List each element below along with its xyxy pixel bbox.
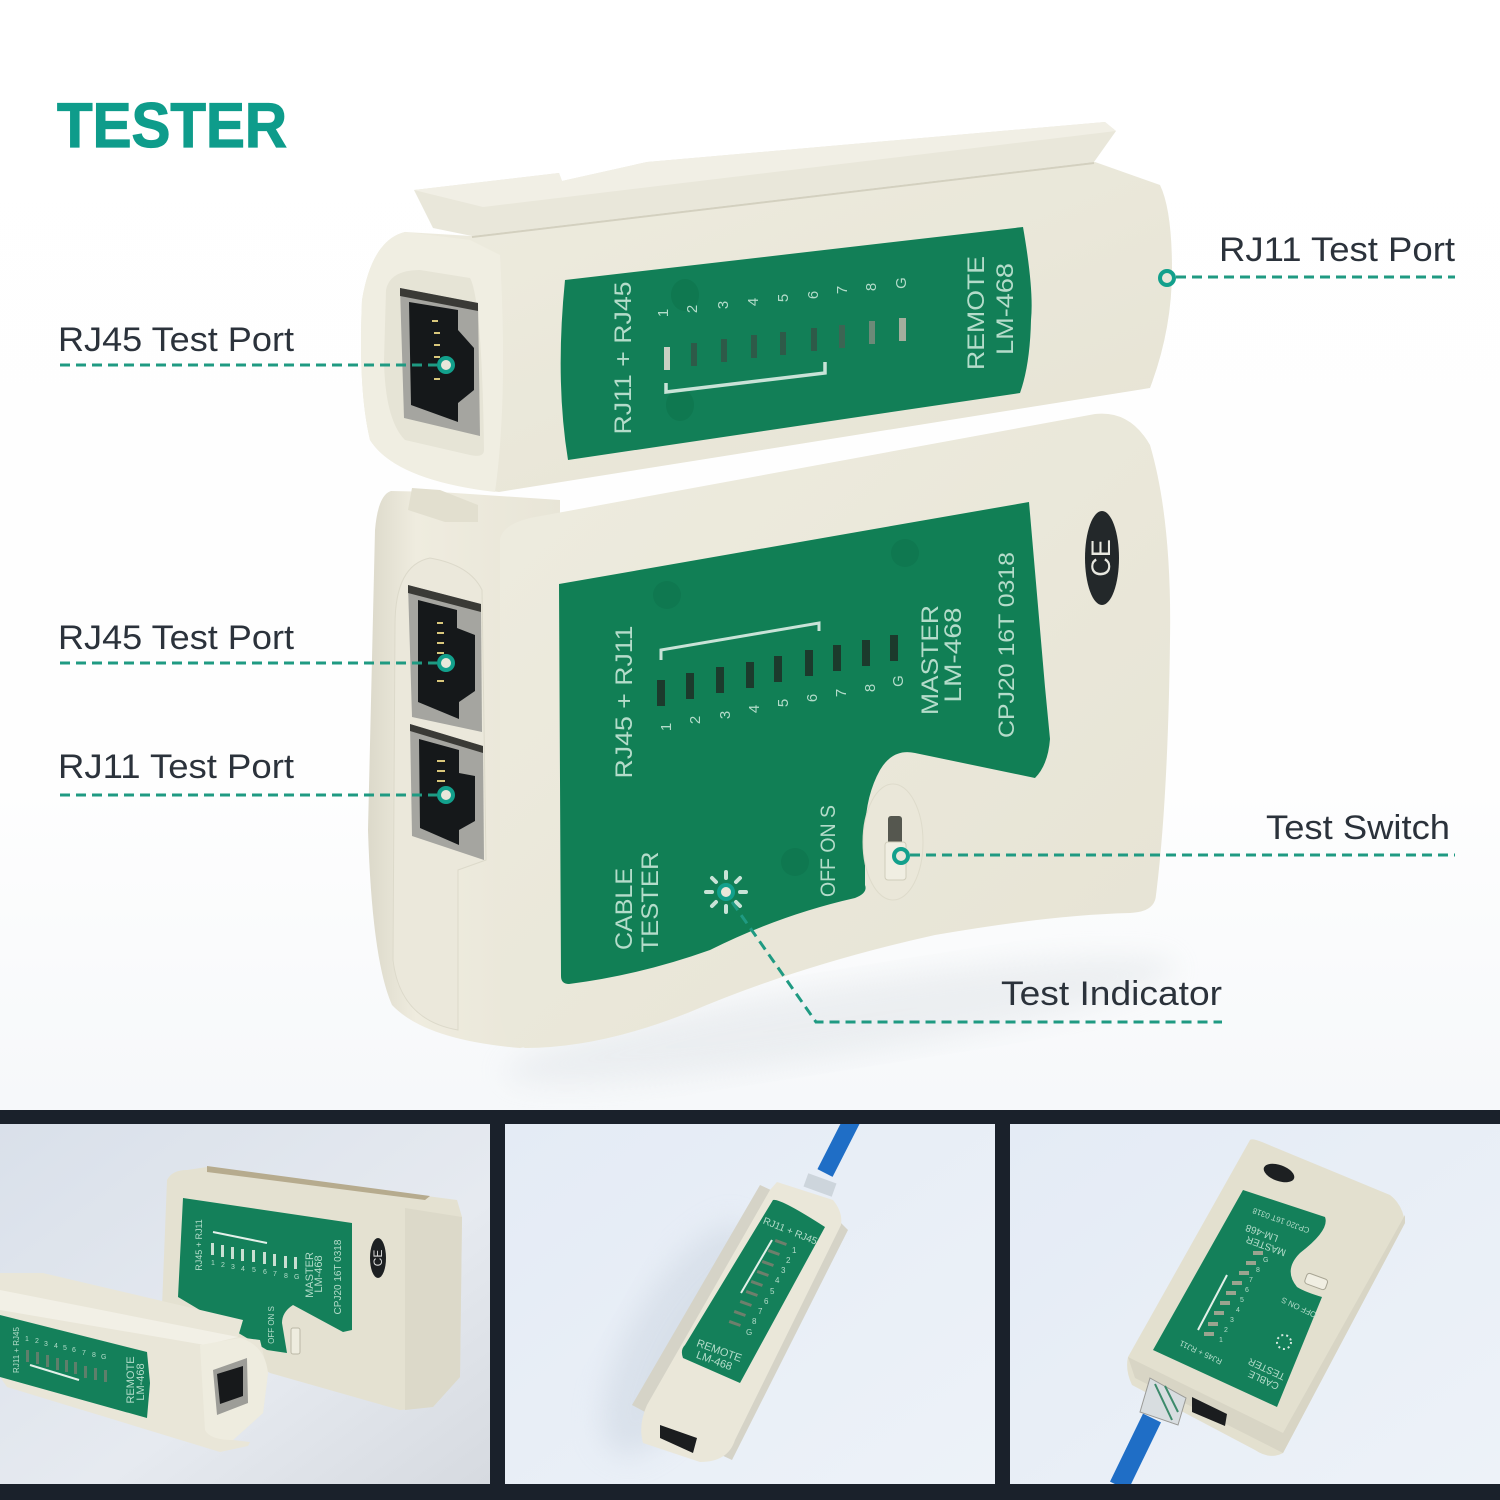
- photo panel: remote with cable: 2: [786, 1256, 791, 1265]
- photo panel: master with cable: 4: [1236, 1307, 1240, 1314]
- photo panel: two units: 2: [221, 1262, 225, 1269]
- remote label text: 8: [863, 283, 880, 291]
- master label text: 8: [862, 684, 879, 692]
- callout: RJ11 test port (master): [58, 748, 453, 802]
- photo panel: master with cable: LM-468: [1244, 1221, 1280, 1243]
- photo panel: two units: 4: [54, 1343, 58, 1350]
- remote bracket: [666, 362, 825, 392]
- photo panel: remote with cable: G: [746, 1328, 752, 1337]
- photo panel: two units: 6: [263, 1269, 267, 1276]
- callout: RJ45 test port (remote): [58, 321, 453, 372]
- remote label text: 7: [834, 286, 851, 294]
- ports and cable in panel: [1192, 1397, 1227, 1426]
- photo panel: two units: G: [101, 1354, 106, 1361]
- remote label text: 3: [715, 301, 732, 309]
- photo panel: two units: 3: [44, 1341, 48, 1348]
- remote label text: G: [893, 277, 910, 289]
- callout: RJ45 test port (master): RJ45 Test Port: [58, 619, 295, 657]
- master label text: [611, 552, 1019, 952]
- master label text: 7: [833, 689, 850, 697]
- photo panel: remote with cable: 1: [792, 1246, 797, 1255]
- master front face: [500, 414, 1170, 1048]
- remote rails: [632, 1185, 775, 1412]
- photo panel: master with cable: CABLE: [1246, 1367, 1281, 1391]
- photo panel: master with cable: 8: [1256, 1267, 1260, 1274]
- remote rail: [414, 122, 1116, 236]
- photo panel: remote with cable: 7: [758, 1307, 763, 1316]
- callout: RJ11 test port (remote): [1160, 231, 1456, 285]
- remote end face: [361, 232, 503, 492]
- master body in panel: [1127, 1139, 1405, 1456]
- master label text: LM-468: [940, 608, 967, 702]
- remote label text: REMOTE: [963, 256, 990, 370]
- photo panel: two units: OFF ON S: [267, 1306, 276, 1344]
- remote label text: 2: [684, 305, 701, 313]
- photo panel: master with cable: TESTER: [1247, 1355, 1287, 1382]
- master label text: 4: [746, 705, 763, 713]
- master label text: CPJ20 16T 0318: [994, 552, 1019, 738]
- title: TESTER: [57, 91, 287, 161]
- photo panel: remote with cable: LM-468: [694, 1349, 734, 1373]
- photo panel: master with cable: G: [1263, 1257, 1268, 1264]
- photo panel: two units: 8: [284, 1273, 288, 1280]
- blue cable: [825, 1120, 852, 1173]
- master label text: 5: [775, 699, 792, 707]
- bottom dark band: [0, 1110, 1500, 1500]
- RJ45 port on master: [408, 585, 482, 732]
- remote green label: [561, 227, 1032, 460]
- remote body: [361, 162, 1172, 492]
- photo panel: two units: 7: [82, 1350, 86, 1357]
- master label text: G: [890, 675, 907, 687]
- photo panel: two units: REMOTE: [125, 1356, 137, 1404]
- RJ11 port on master: [410, 724, 484, 860]
- photo panel: two units: 2: [35, 1338, 39, 1345]
- photo panel: two units: 4: [241, 1266, 245, 1273]
- photo panel: two units: 8: [92, 1352, 96, 1359]
- remote tester unit: [361, 122, 1172, 492]
- photo panel: master with cable: 1: [1219, 1337, 1223, 1344]
- remote label text: 4: [745, 298, 762, 306]
- master green label: [559, 502, 1050, 984]
- master tester unit: [368, 414, 1170, 1048]
- photo panel: master with cable: 7: [1249, 1277, 1253, 1284]
- photo panel: two units: 3: [231, 1264, 235, 1271]
- icon: indicator sun: [706, 872, 746, 912]
- remote label text: 5: [775, 294, 792, 302]
- photo panel: remote with cable: 5: [770, 1287, 775, 1296]
- callout: RJ11 test port (remote): RJ11 Test Port: [1219, 231, 1456, 269]
- CE mark: [1085, 511, 1119, 605]
- RJ45 port on remote: [400, 288, 480, 436]
- photo panel: two units: 7: [273, 1271, 277, 1278]
- callout: RJ45 test port (remote): RJ45 Test Port: [58, 321, 295, 359]
- photo panel: remote with cable: RJ11 + RJ45: [761, 1216, 819, 1248]
- CE mark: CE: [1086, 539, 1116, 577]
- master label text: 6: [804, 694, 821, 702]
- master label text: RJ45 + RJ11: [611, 626, 638, 778]
- photo panel: master with cable: RJ45 + RJ11: [1178, 1338, 1224, 1366]
- remote label text: RJ11 + RJ45: [610, 282, 637, 434]
- master label text: 2: [687, 716, 704, 724]
- remote label text: [610, 256, 1019, 434]
- remote LED bars: [664, 318, 906, 370]
- master label text: CABLE: [611, 868, 638, 950]
- photo panel: two units: [0, 1124, 490, 1484]
- photo panel: two units: LM-468: [135, 1363, 147, 1401]
- callout: test switch: [894, 809, 1455, 863]
- photo panel: two units: CPJ20 16T 0318: [333, 1239, 344, 1314]
- callout: RJ11 test port (master): RJ11 Test Port: [58, 748, 295, 786]
- test switch: [863, 784, 923, 900]
- photo panel: two units: G: [294, 1274, 299, 1281]
- remote label text: LM-468: [992, 263, 1019, 355]
- callout: test switch: Test Switch: [1266, 809, 1450, 847]
- remote label text: 6: [805, 291, 822, 299]
- photo panel: master with cable: OFF ON S: [1280, 1295, 1318, 1319]
- remote unit in panel: [0, 1273, 268, 1452]
- callout: test indicator: [719, 885, 1222, 1022]
- photo panel: master with cable: 5: [1240, 1297, 1244, 1304]
- photo panel: master with cable: MASTER: [1245, 1233, 1288, 1258]
- master label text: MASTER: [917, 605, 944, 715]
- photo panel: remote with cable: 8: [752, 1317, 757, 1326]
- photo panel: two units: CE: [371, 1250, 385, 1266]
- photo panel: master with cable: 6: [1245, 1287, 1249, 1294]
- master body side: [368, 491, 560, 1048]
- callout: test indicator: Test Indicator: [1001, 975, 1222, 1013]
- photo panel: two units: 1: [25, 1336, 29, 1343]
- photo panel: two units: MASTER: [304, 1252, 316, 1298]
- photo panel: two units: 5: [63, 1345, 67, 1352]
- master label text: OFF ON S: [817, 805, 840, 897]
- remote label text: 1: [655, 309, 672, 317]
- photo panel: two units: 1: [211, 1260, 215, 1267]
- photo panel: master with cable: CPJ20 16T 0318: [1251, 1206, 1311, 1235]
- photo panel: two units: 5: [252, 1267, 256, 1274]
- master label text: 3: [717, 711, 734, 719]
- callout: RJ45 test port (master): [58, 619, 453, 670]
- master label text: 1: [658, 723, 675, 731]
- master LED bars: [657, 635, 898, 706]
- photo panel: remote with cable: 3: [781, 1266, 786, 1275]
- master bracket: [661, 623, 819, 660]
- photo panel: two units: RJ45 + RJ11: [194, 1219, 204, 1271]
- photo panel: two units: 6: [72, 1347, 76, 1354]
- photo panel: two units: LM-468: [313, 1255, 325, 1293]
- photo panel: remote with cable: [505, 1120, 995, 1484]
- photo panel: remote with cable: 4: [775, 1276, 780, 1285]
- photo panel: remote with cable: REMOTE: [695, 1337, 743, 1365]
- photo panel: master with cable: [1010, 1124, 1500, 1486]
- icon: panel sun: [1277, 1335, 1291, 1349]
- photo panel: master with cable: 3: [1230, 1317, 1234, 1324]
- photo panel: two units: RJ11 + RJ45: [12, 1327, 21, 1373]
- photo panel: master with cable: 2: [1224, 1327, 1228, 1334]
- remote body in panel: [641, 1182, 841, 1462]
- photo panel: remote with cable: 6: [764, 1297, 769, 1306]
- master label text: TESTER: [637, 851, 664, 953]
- master unit in panel: [162, 1167, 462, 1410]
